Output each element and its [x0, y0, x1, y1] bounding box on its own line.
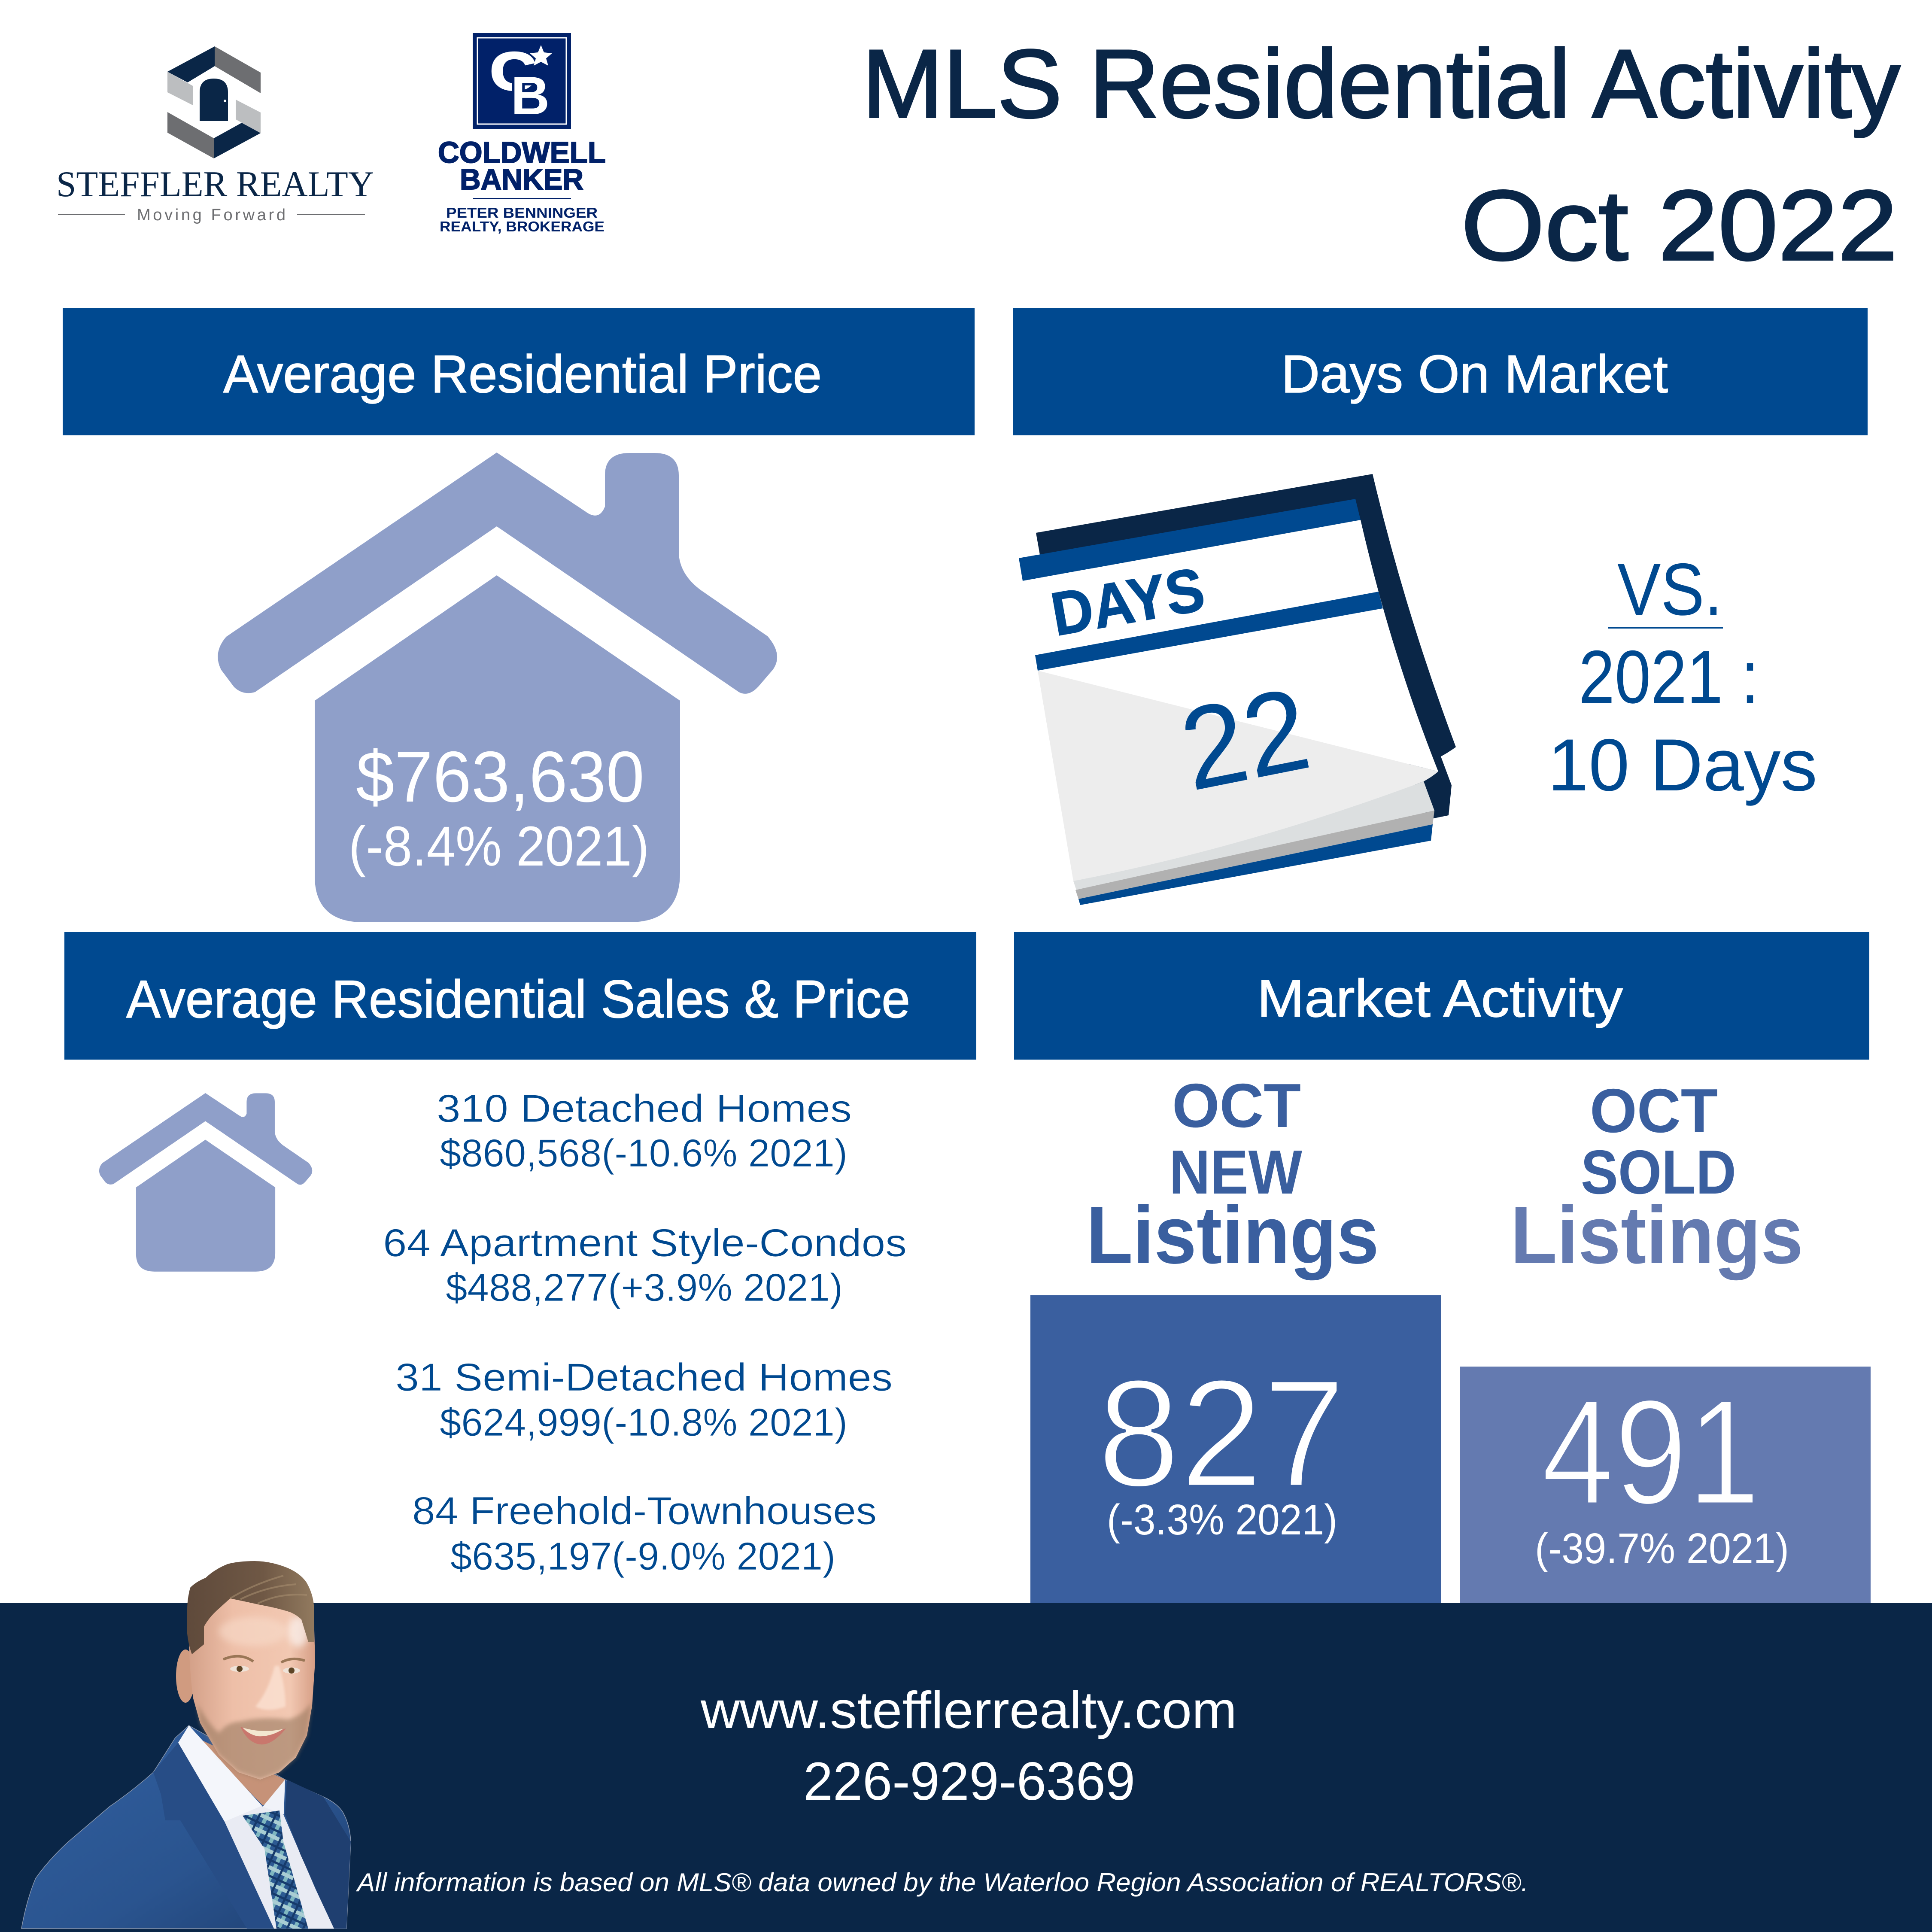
panel: average residential sales and price	[64, 932, 976, 1578]
website: www.stefflerrealty.com	[700, 1681, 1237, 1739]
title: Oct 2022	[1461, 170, 1898, 281]
forehead highlight	[288, 1616, 309, 1647]
label: new listings	[1086, 1071, 1379, 1281]
icon: CB monogram	[473, 33, 571, 129]
heading bar: Average Residential Price	[223, 345, 822, 404]
comparison: versus 2021	[1548, 548, 1817, 806]
bar: new listings 827	[1030, 1295, 1441, 1604]
icon: tear-off calendar: DAYS	[1046, 555, 1209, 649]
icon: house with price	[218, 453, 777, 922]
icon: house with price: $763,630	[356, 736, 644, 817]
bar: sold listings 491: (-39.7% 2021)	[1535, 1525, 1789, 1573]
tie	[243, 1810, 308, 1929]
list: freehold townhouses: 84 Freehold-Townhouses	[412, 1489, 877, 1533]
list: detached homes: $860,568(-10.6% 2021)	[440, 1132, 848, 1175]
logo: Steffler Realty	[56, 46, 374, 224]
tagline: Moving Forward	[137, 206, 286, 224]
list: semi-detached homes	[395, 1356, 893, 1444]
list: apartment style condos	[383, 1221, 907, 1309]
icon: small house	[99, 1093, 312, 1272]
title	[862, 29, 1900, 281]
comparison: versus 2021: 10 Days	[1548, 724, 1817, 806]
left lapel	[153, 1743, 274, 1929]
label: sold listings: SOLD	[1581, 1137, 1736, 1207]
label: sold listings	[1510, 1076, 1803, 1281]
icon: CB monogram: B	[511, 66, 550, 126]
comparison: versus 2021: 2021 :	[1579, 635, 1759, 719]
heading bar: Average Residential Sales & Price	[126, 970, 910, 1029]
logo: Coldwell Banker: PETER BENNINGER	[446, 205, 598, 221]
list: detached homes: 310 Detached Homes	[437, 1087, 852, 1130]
bar: new listings 827: 827	[1097, 1347, 1346, 1519]
list: semi-detached homes: 31 Semi-Detached Homes	[395, 1356, 893, 1399]
list: semi-detached homes: $624,999(-10.8% 2021)	[440, 1401, 848, 1444]
bar: new listings 827: (-3.3% 2021)	[1107, 1496, 1337, 1544]
label: new listings: Listings	[1086, 1190, 1379, 1281]
comparison: versus 2021: VS.	[1617, 548, 1722, 631]
disclaimer: All information is based on MLS® data owned by the Waterloo Region Association of REALTORS®.	[356, 1868, 1528, 1897]
brand name: STEFFLER REALTY	[56, 164, 374, 204]
stubble	[197, 1702, 312, 1780]
heading bar: Market Activity	[1257, 969, 1623, 1028]
list: freehold townhouses: $635,197(-9.0% 2021)	[450, 1535, 835, 1578]
icon: house with price: (-8.4% 2021)	[349, 814, 649, 878]
list: apartment style condos: $488,277(+3.9% 2021)	[446, 1266, 843, 1309]
brokerage name: COLDWELL	[438, 136, 606, 169]
footer band	[0, 1603, 1932, 1932]
icon: tear-off calendar	[1019, 474, 1456, 905]
right lapel	[285, 1780, 351, 1929]
hair	[187, 1561, 314, 1654]
shirt	[178, 1725, 334, 1929]
title: MLS Residential Activity	[862, 29, 1900, 138]
icon: Steffler S house mark	[167, 46, 261, 158]
logo: Coldwell Banker: REALTY, BROKERAGE	[440, 219, 605, 234]
icon: CB monogram: C	[490, 42, 536, 101]
portrait photo	[21, 1561, 351, 1929]
mouth	[240, 1727, 286, 1744]
hair texture	[230, 1576, 307, 1604]
ear	[176, 1649, 195, 1703]
label: sold listings: Listings	[1510, 1190, 1803, 1281]
heading bar: Days On Market	[1281, 345, 1668, 404]
bar: sold listings 491: 491	[1541, 1368, 1760, 1536]
heading bar	[64, 932, 976, 1060]
label: new listings: NEW	[1169, 1137, 1302, 1207]
heading bar	[63, 308, 975, 435]
list: apartment style condos: 64 Apartment Style-Condos	[383, 1221, 907, 1265]
collar flap	[178, 1725, 262, 1822]
nose	[255, 1666, 286, 1710]
label: sold listings: OCT	[1590, 1076, 1718, 1145]
panel: days on market	[1013, 308, 1868, 905]
bar: sold listings 491	[1460, 1367, 1871, 1604]
suit	[21, 1725, 351, 1929]
right collar	[263, 1780, 285, 1814]
heading bar	[1013, 308, 1868, 435]
heading bar	[1014, 932, 1869, 1060]
list: freehold townhouses	[412, 1489, 877, 1578]
eyes	[230, 1666, 249, 1672]
eyebrows	[223, 1656, 253, 1662]
list: detached homes	[437, 1087, 852, 1175]
panel: average residential price	[63, 308, 975, 922]
neck	[197, 1738, 285, 1805]
face	[189, 1580, 315, 1780]
icon: tear-off calendar: 22	[1171, 663, 1319, 815]
label: new listings: OCT	[1172, 1071, 1301, 1140]
panel: market activity	[1014, 932, 1871, 1604]
phone: 226-929-6369	[803, 1752, 1135, 1811]
logo: Coldwell Banker	[438, 33, 606, 234]
logo: Coldwell Banker: BANKER	[460, 163, 583, 196]
